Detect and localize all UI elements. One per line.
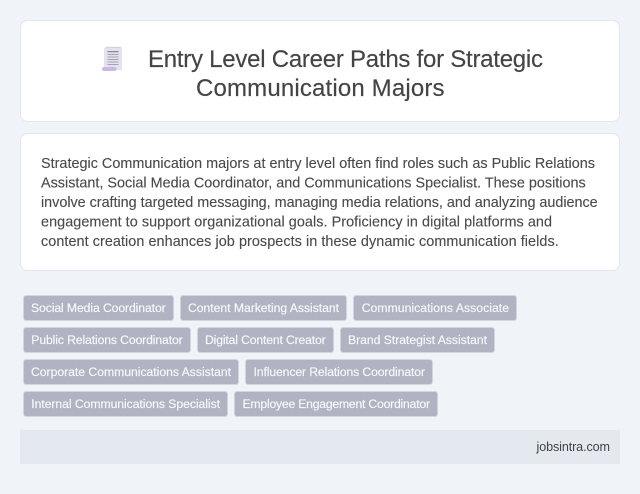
tag: Digital Content Creator bbox=[198, 328, 334, 352]
tag: Internal Communications Specialist: Internal Communications Specialist bbox=[31, 397, 221, 411]
title: Communication Majors bbox=[196, 75, 444, 102]
footer bar bbox=[20, 430, 620, 464]
tag: Content Marketing Assistant: Content Marketing Assistant bbox=[188, 301, 340, 315]
title bbox=[148, 46, 543, 102]
tag: Employee Engagement Coordinator: Employee Engagement Coordinator bbox=[242, 397, 430, 411]
tag: Content Marketing Assistant bbox=[180, 296, 346, 320]
tag: Corporate Communications Assistant bbox=[24, 360, 238, 384]
tag: Employee Engagement Coordinator bbox=[234, 392, 438, 416]
tag list bbox=[24, 296, 516, 416]
tag: Influencer Relations Coordinator: Influencer Relations Coordinator bbox=[254, 365, 425, 379]
tag: Brand Strategist Assistant bbox=[340, 328, 494, 352]
text block: description: Strategic Communication majors at entry level often find roles such as Public Relations bbox=[41, 156, 595, 172]
text block: description: involve crafting targeted messaging, managing media relations, and analyzing audience bbox=[41, 195, 598, 211]
tag: Brand Strategist Assistant: Brand Strategist Assistant bbox=[348, 333, 488, 347]
footer source text: jobsintra.com bbox=[536, 440, 610, 454]
tag: Corporate Communications Assistant: Corporate Communications Assistant bbox=[31, 365, 232, 379]
title: Entry Level Career Paths for Strategic bbox=[148, 46, 543, 73]
tag: Communications Associate bbox=[354, 296, 516, 320]
tag: Communications Associate: Communications Associate bbox=[362, 301, 509, 315]
text block: description: content creation enhances job prospects in these dynamic communication fields. bbox=[41, 234, 559, 250]
tag: Public Relations Coordinator: Public Relations Coordinator bbox=[31, 333, 183, 347]
tag: Internal Communications Specialist bbox=[24, 392, 228, 416]
panel: title card bbox=[20, 20, 620, 122]
tag: Social Media Coordinator bbox=[24, 296, 174, 320]
text block: description: Assistant, Social Media Coordinator, and Communications Specialist. These positions bbox=[41, 176, 586, 192]
tag: Digital Content Creator: Digital Content Creator bbox=[205, 333, 326, 347]
tag: Public Relations Coordinator bbox=[24, 328, 190, 352]
panel: description card bbox=[20, 134, 620, 270]
icon: document scroll bbox=[102, 47, 122, 71]
tag: Influencer Relations Coordinator bbox=[246, 360, 432, 384]
text block: description: engagement to support organizational goals. Proficiency in digital platforms and bbox=[41, 214, 552, 230]
text block: description bbox=[41, 156, 598, 250]
tag: Social Media Coordinator: Social Media Coordinator bbox=[31, 301, 166, 315]
